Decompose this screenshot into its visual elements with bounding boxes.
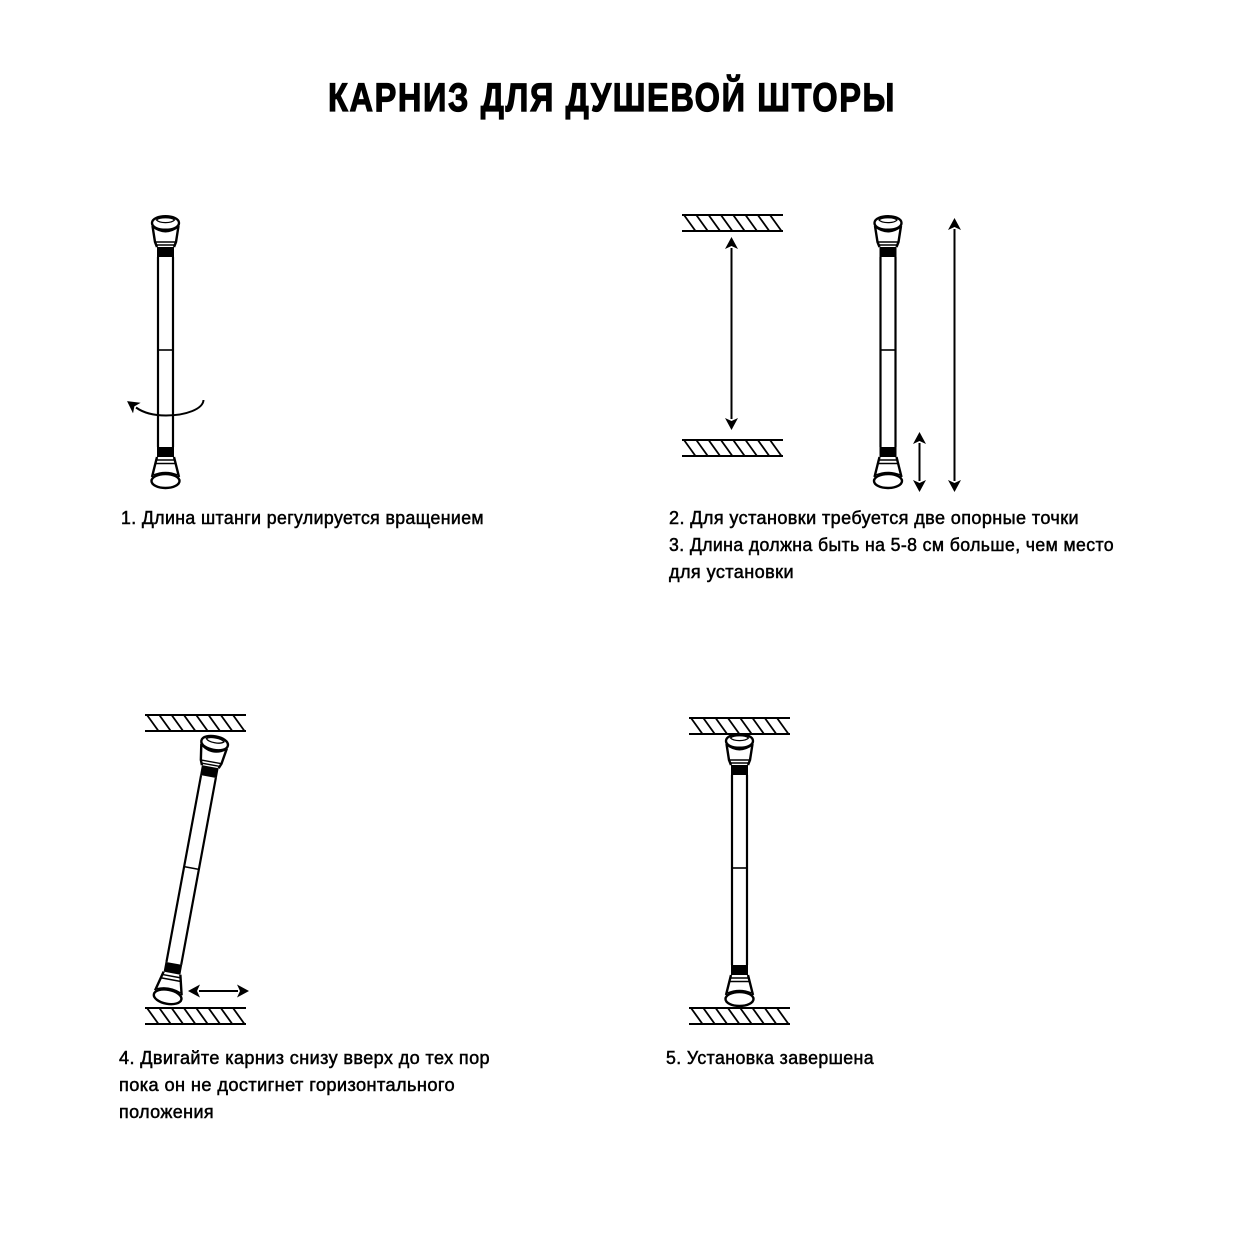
text: steps 2 and 3 caption: 2. Для установки требуется две опорные точки xyxy=(669,508,1079,528)
arrow: horizontal movement xyxy=(199,990,238,992)
icon: bottom support xyxy=(145,1008,246,1024)
icon: tilted rod xyxy=(153,734,230,1006)
text: step 4 caption: пока он не достигнет горизонтального xyxy=(119,1075,455,1095)
text: step 4 caption xyxy=(119,1048,490,1122)
panel: step 5 installed xyxy=(666,718,875,1068)
title: КАРНИЗ ДЛЯ ДУШЕВОЙ ШТОРЫ xyxy=(328,74,896,120)
text: steps 2 and 3 caption: 3. Длина должна быть на 5-8 см больше, чем место xyxy=(669,535,1114,555)
text: step 5 caption: 5. Установка завершена xyxy=(666,1048,875,1068)
icon: bottom support xyxy=(682,440,783,456)
arrow: extra length xyxy=(918,443,920,481)
text: step 4 caption: положения xyxy=(119,1102,214,1122)
text: step 4 caption: 4. Двигайте карниз снизу вверх до тех пор xyxy=(119,1048,490,1068)
panel: step 4 tilt into place xyxy=(119,715,490,1122)
text: steps 2 and 3 caption: для установки xyxy=(669,562,794,582)
text: step 1 caption: 1. Длина штанги регулируется вращением xyxy=(121,508,484,528)
icon: top support xyxy=(689,718,790,734)
icon: installed rod xyxy=(726,734,754,1006)
panel: steps 2 and 3 measure xyxy=(669,215,1114,582)
icon: bottom support xyxy=(689,1008,790,1024)
arrow: full rod length xyxy=(954,229,956,481)
icon: rod step 2 xyxy=(874,216,902,488)
icon: top support xyxy=(682,215,783,231)
arrow: rotation xyxy=(136,400,204,416)
icon: rod step 1 xyxy=(152,216,180,488)
arrow: distance between supports xyxy=(730,248,732,419)
icon: top support xyxy=(145,715,246,731)
text: steps 2 and 3 caption xyxy=(669,508,1114,582)
panel: step 1 rotate rod xyxy=(121,216,484,528)
